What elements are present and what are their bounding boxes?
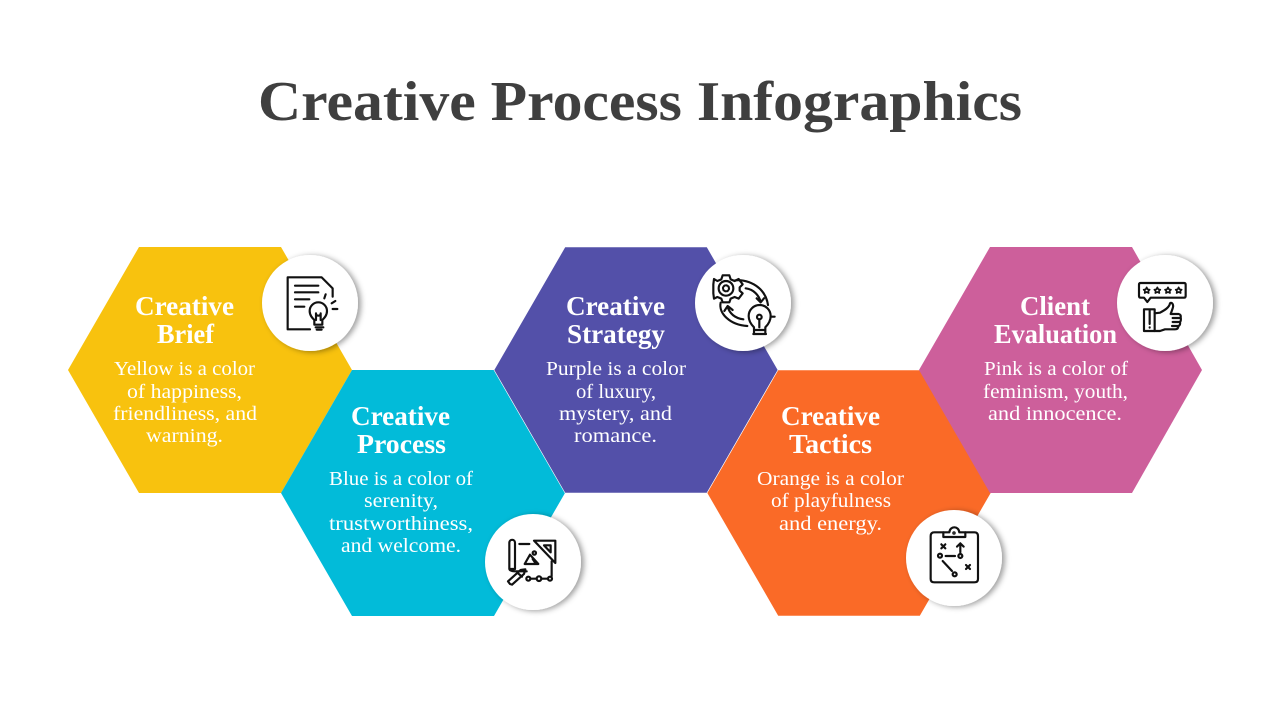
icon: gear and bulb cycle [695,255,791,351]
heading: creative strategy [566,291,666,349]
text: blue description: trustworthiness, [329,513,473,535]
hexagon: pink [919,247,1202,493]
heading: creative tactics [781,401,880,459]
text: yellow description: Yellow is a color [114,358,255,380]
heading: creative process: Creative [351,401,450,431]
text: blue description: Blue is a color of [329,468,473,490]
text: purple description: of luxury, [576,381,656,403]
hexagon: orange [707,370,991,616]
panel: creative brief [68,247,352,493]
heading: creative tactics: Tactics [789,429,872,459]
heading: creative brief: Brief [157,319,215,349]
icon: clipboard with play diagram [906,510,1002,606]
heading: creative brief [135,291,234,349]
text: orange description [757,468,904,535]
text: pink description: and innocence. [988,403,1122,425]
heading: creative tactics: Creative [781,401,880,431]
text: pink description: feminism, youth, [983,381,1128,403]
text: orange description: Orange is a color [757,468,904,490]
heading: creative strategy: Creative [566,291,665,321]
text: orange description: and energy. [779,513,882,535]
heading: client evaluation: Client [1020,291,1090,321]
title: Creative Process Infographics [258,71,1022,133]
text: blue description: and welcome. [341,535,461,557]
text: pink description: Pink is a color of [984,358,1128,380]
heading: creative strategy: Strategy [567,319,666,349]
heading: client evaluation: Evaluation [994,319,1117,349]
text: blue description [329,468,473,557]
panel: client evaluation [919,247,1202,493]
heading: creative process [351,401,450,459]
text: pink description [983,358,1128,425]
text: yellow description: warning. [146,425,223,447]
text: orange description: of playfulness [771,490,891,512]
panel: creative strategy [494,247,778,493]
text: blue description: serenity, [364,490,438,512]
heading: creative brief: Creative [135,291,234,321]
icon: document with light bulb [262,255,358,351]
text: yellow description: of happiness, [127,381,242,403]
heading: creative process: Process [357,429,446,459]
icon: star rating with thumbs up [1117,255,1213,351]
text: purple description: mystery, and [559,403,672,425]
heading: client evaluation [994,291,1117,349]
panel: creative process [281,370,565,616]
hexagon: blue [281,370,565,616]
text: purple description [546,358,686,447]
text: yellow description: friendliness, and [113,403,257,425]
hexagon: yellow [68,247,352,493]
hexagon: purple [494,247,778,493]
text: purple description: romance. [574,425,657,447]
text: yellow description [113,358,257,447]
panel: creative tactics [707,370,991,616]
text: purple description: Purple is a color [546,358,686,380]
icon: blueprint with pencil and ruler [485,514,581,610]
